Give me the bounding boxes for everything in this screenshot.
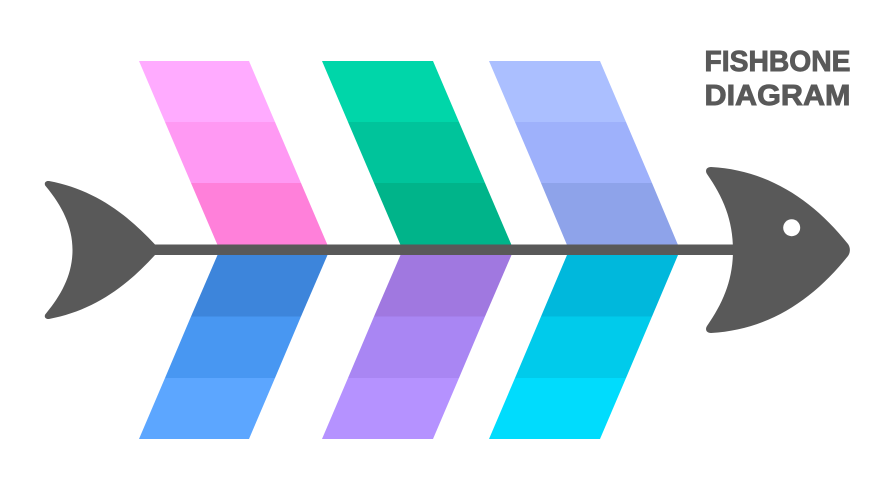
bone: cyan lower: [489, 255, 678, 439]
fish eye: [783, 219, 800, 236]
bone: periwinkle upper: [489, 61, 678, 245]
bone: purple lower: [322, 255, 512, 439]
bone: green upper: [322, 61, 512, 245]
title: [704, 46, 850, 112]
title: DIAGRAM: [704, 80, 850, 112]
spine: [150, 244, 740, 255]
bone: pink upper: [139, 61, 328, 245]
bone: blue lower: [139, 255, 328, 439]
title: FISHBONE: [704, 46, 850, 78]
fish tail: [45, 181, 155, 319]
fish head: [706, 167, 850, 333]
